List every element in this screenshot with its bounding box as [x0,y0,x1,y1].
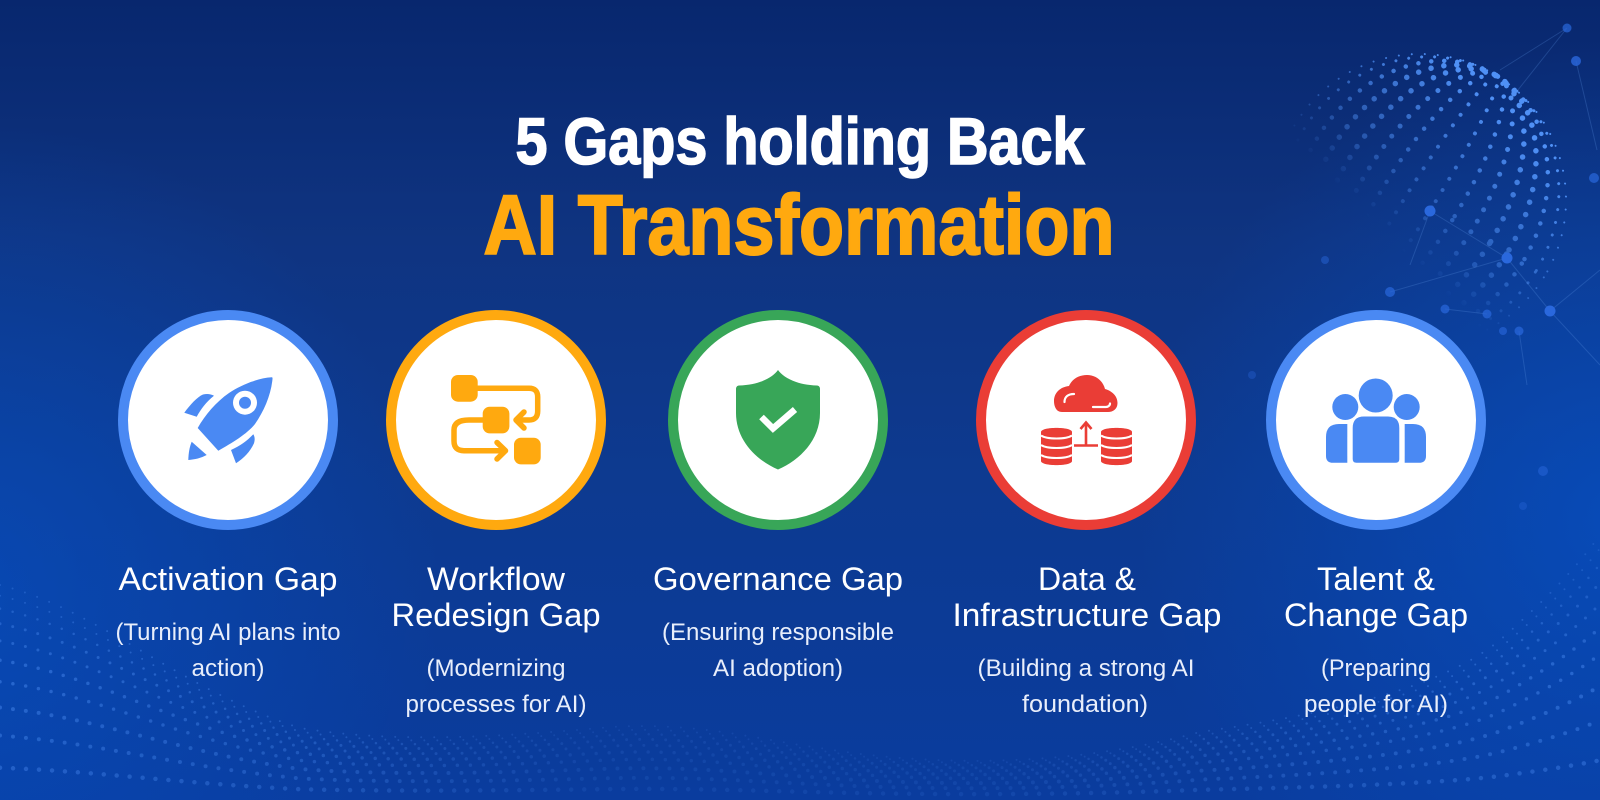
title [484,104,1114,272]
ring [981,315,1191,525]
title line 1: 5 Gaps holding Back [516,104,1085,178]
description [406,655,586,718]
panel: activation gap [116,315,340,682]
heading [392,561,600,633]
description: (Ensuring responsible [662,619,894,646]
decorative dotted globe [1294,53,1567,324]
heading: Talent & [1317,561,1435,597]
description: foundation) [1022,691,1148,718]
icon: workflow [451,375,541,464]
decorative network nodes [1248,24,1600,510]
heading: Data & [1038,561,1136,597]
heading [1284,561,1468,633]
panel: workflow redesign gap [391,315,601,718]
heading: Workflow [427,561,566,597]
heading: Activation Gap [118,561,338,597]
panel: talent and change gap [1271,315,1481,718]
icon: cloud and databases [1041,375,1132,465]
title line 2: AI Transformation [484,178,1114,272]
decorative dotted wave [0,535,1600,794]
icon: people [1326,378,1426,463]
icon: rocket [184,377,273,463]
description [662,619,894,682]
description: (Building a strong AI [978,655,1194,682]
ring [1271,315,1481,525]
ring [673,315,883,525]
heading: Governance Gap [653,561,903,597]
panel: data and infrastructure gap [952,315,1222,718]
ring [391,315,601,525]
description [116,619,340,682]
description: (Preparing [1321,655,1431,682]
description: processes for AI) [406,691,586,718]
panel: governance gap [653,315,903,682]
description: (Turning AI plans into [116,619,340,646]
ring [123,315,333,525]
heading: Change Gap [1284,597,1468,633]
heading [952,561,1222,633]
icon: shield with check [736,370,820,470]
description: (Modernizing [426,655,566,682]
heading: Infrastructure Gap [952,597,1222,633]
description [978,655,1194,718]
heading: Redesign Gap [392,597,600,633]
description: action) [192,655,264,682]
description: AI adoption) [713,655,843,682]
description [1304,655,1448,718]
description: people for AI) [1304,691,1448,718]
